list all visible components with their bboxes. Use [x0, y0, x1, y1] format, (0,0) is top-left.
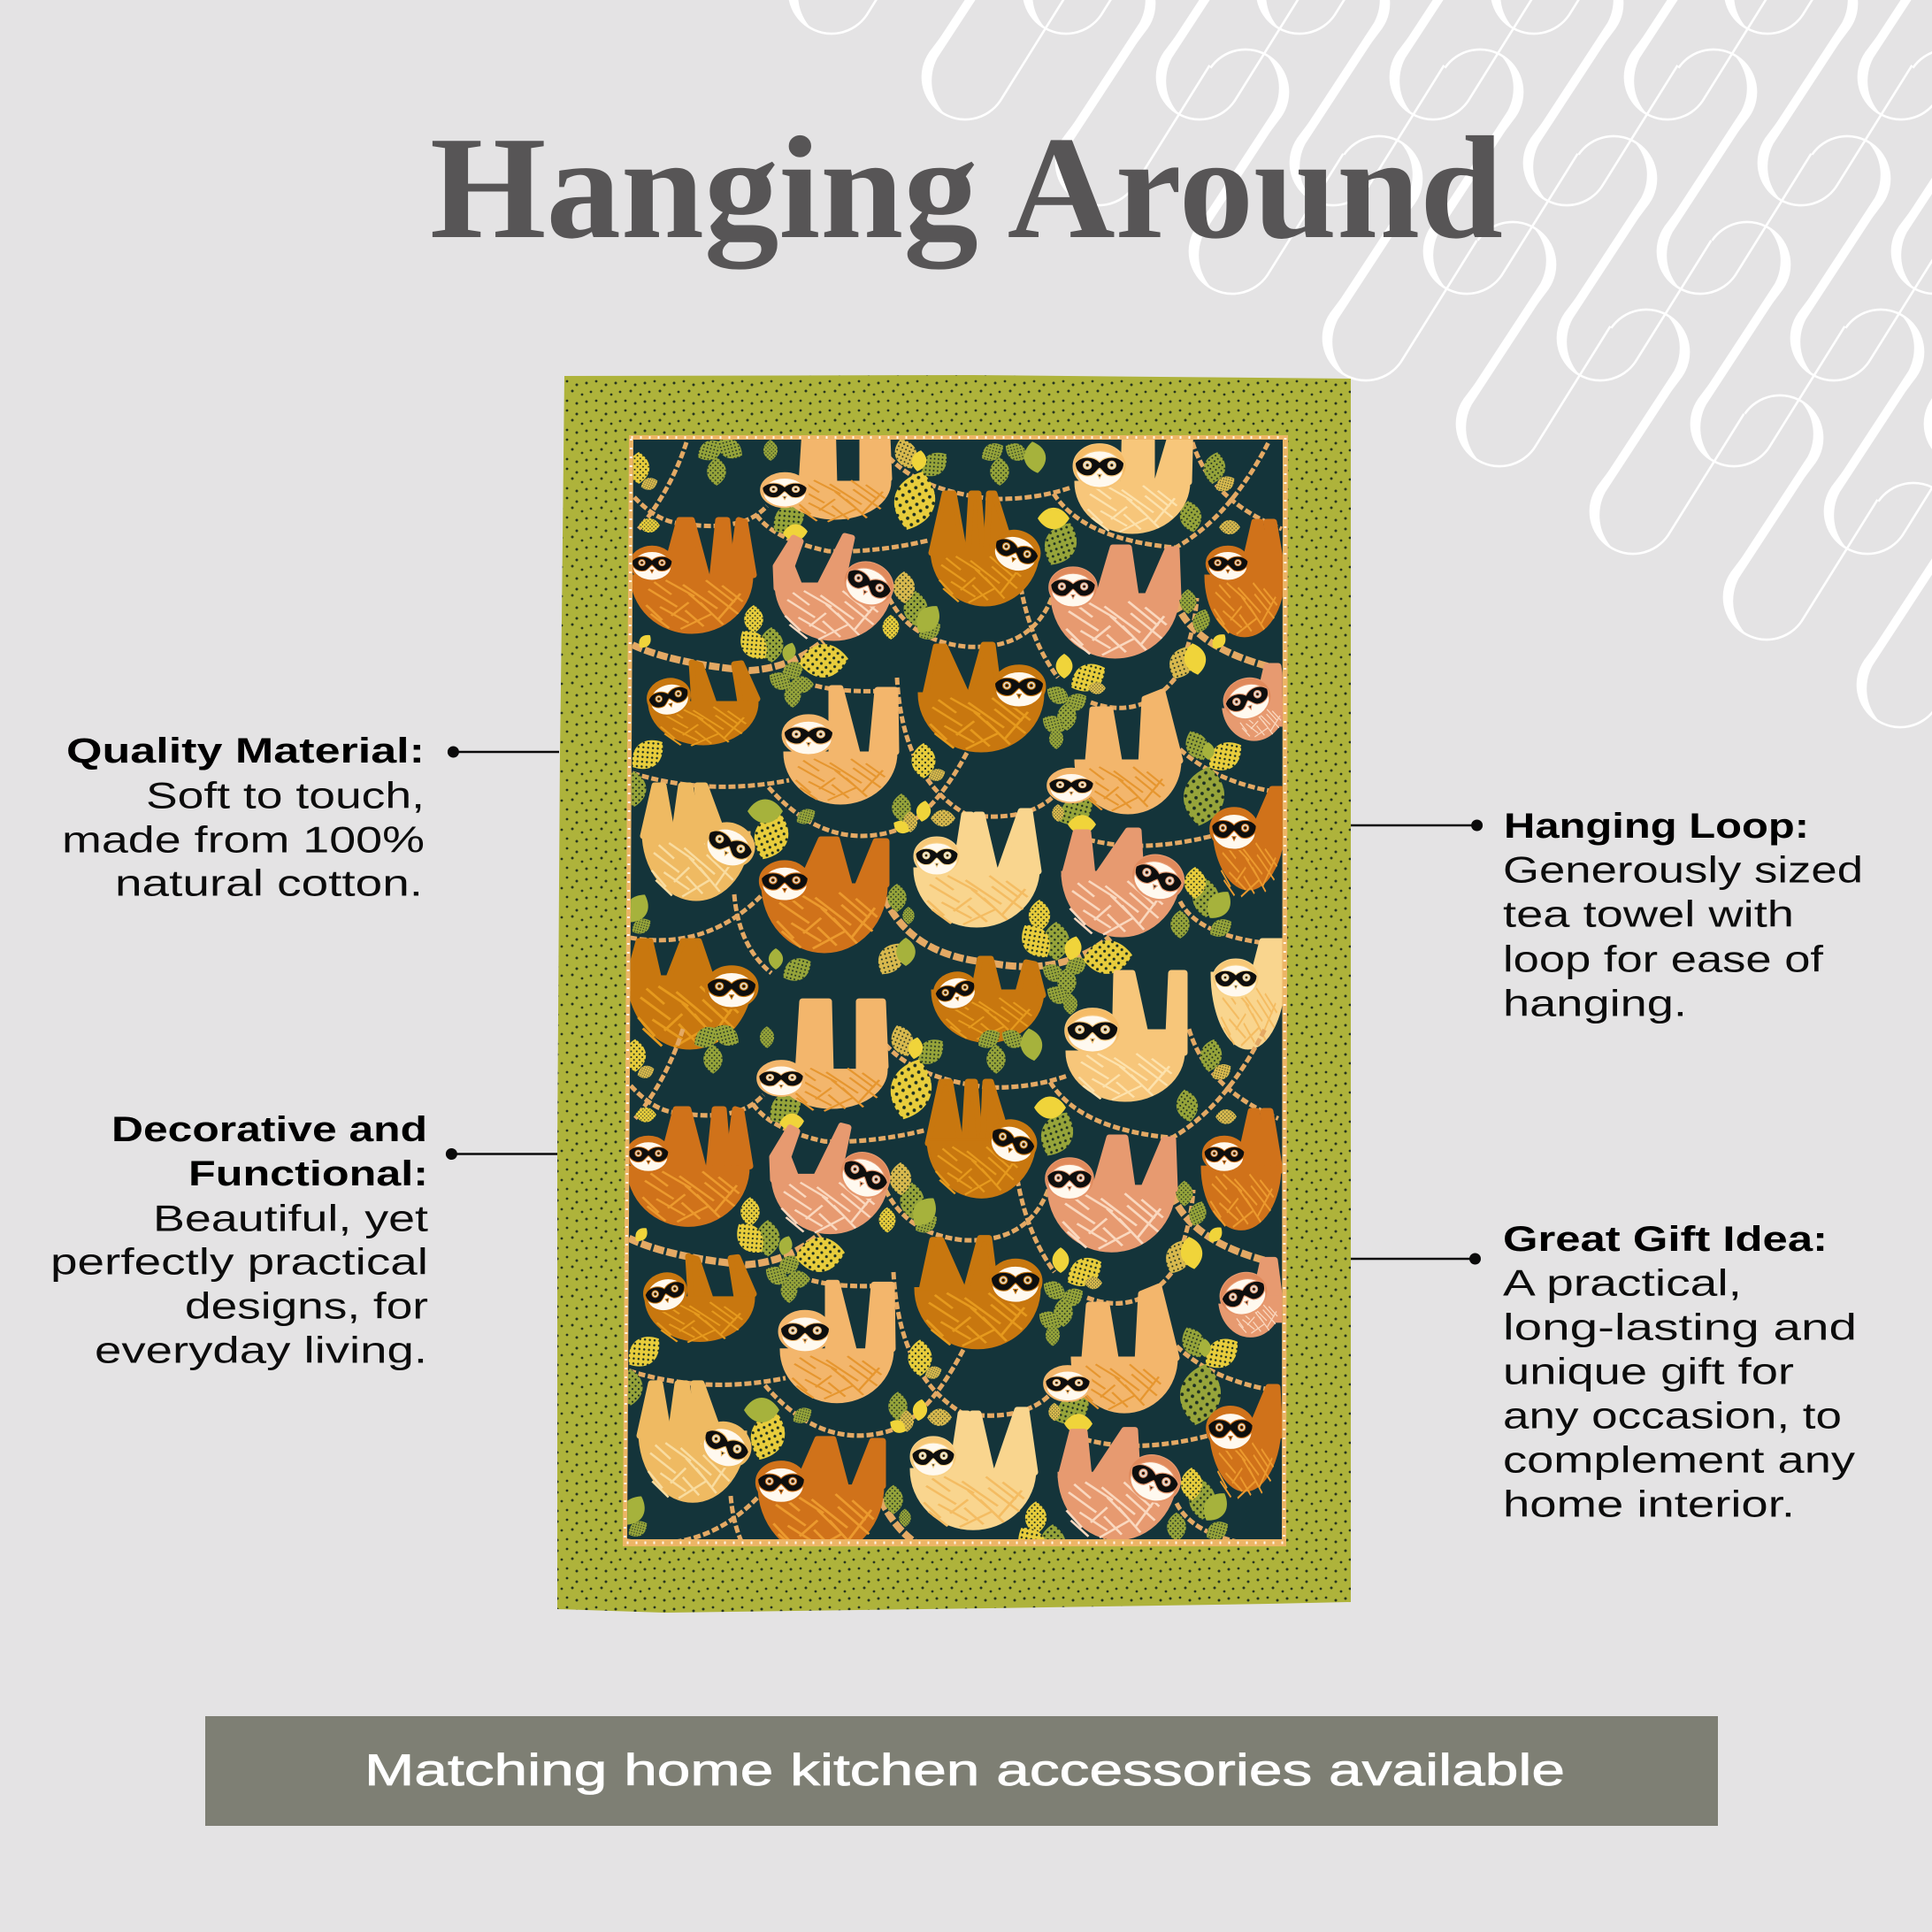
- callout: great gift idea: unique gift for: [1503, 1350, 1794, 1392]
- callout: decorative and functional: designs, for: [185, 1284, 428, 1327]
- callout: hanging loop: loop for ease of: [1503, 938, 1823, 980]
- callout: decorative and functional: [50, 1110, 428, 1371]
- callout: quality material: Quality Material:: [66, 732, 425, 770]
- callout: great gift idea: Great Gift Idea:: [1503, 1220, 1828, 1259]
- callout: hanging loop: [1503, 807, 1863, 1024]
- callout: hanging loop: Generously sized: [1503, 849, 1863, 890]
- callout: decorative and functional: Decorative and: [111, 1110, 427, 1149]
- callout: quality material: natural cotton.: [115, 862, 423, 904]
- callout: great gift idea: A practical,: [1503, 1261, 1742, 1304]
- callout: quality material: [62, 732, 425, 904]
- tea towel: [557, 375, 1351, 1655]
- callout: hanging loop: tea towel with: [1503, 893, 1794, 934]
- callout: quality material: Soft to touch,: [146, 775, 425, 816]
- callout: great gift idea: any occasion, to: [1503, 1394, 1842, 1437]
- callout: decorative and functional: everyday living.: [95, 1329, 427, 1371]
- connector: great gift idea: [1351, 1253, 1481, 1265]
- towel dark panel: [627, 440, 1283, 1539]
- sloth: yellow, top right: [1072, 440, 1193, 534]
- towel inner frame: [623, 435, 1288, 1546]
- decorative white link pattern: [789, 0, 1932, 727]
- callout: hanging loop: Hanging Loop:: [1504, 807, 1809, 846]
- connector: hanging loop: [1351, 819, 1483, 832]
- callout: decorative and functional: Beautiful, yet: [153, 1198, 428, 1238]
- callout: quality material: made from 100%: [62, 819, 425, 860]
- title: Hanging Around: [430, 106, 1503, 270]
- callout: decorative and functional: perfectly practical: [50, 1240, 428, 1283]
- towel green dotted border: [557, 375, 1351, 1613]
- callout: great gift idea: home interior.: [1503, 1483, 1795, 1525]
- callout: great gift idea: long-lasting and: [1503, 1306, 1857, 1348]
- repeat of the sloth print: [627, 998, 1283, 1539]
- connector: decorative and functional: [446, 1148, 557, 1160]
- sloth: yellow, lower right repeat: [1065, 973, 1184, 1100]
- callout: great gift idea: complement any: [1503, 1438, 1855, 1481]
- towel frame stitching: [625, 437, 1285, 1543]
- banner text: Matching home kitchen accessories available: [364, 1745, 1565, 1795]
- callout: hanging loop: hanging.: [1503, 982, 1687, 1024]
- callout: decorative and functional: Functional:: [188, 1154, 428, 1193]
- connector: quality material: [448, 747, 559, 757]
- sloth print pattern: [627, 440, 1283, 1539]
- footer banner: [205, 1716, 1718, 1826]
- callout: great gift idea: [1503, 1220, 1857, 1525]
